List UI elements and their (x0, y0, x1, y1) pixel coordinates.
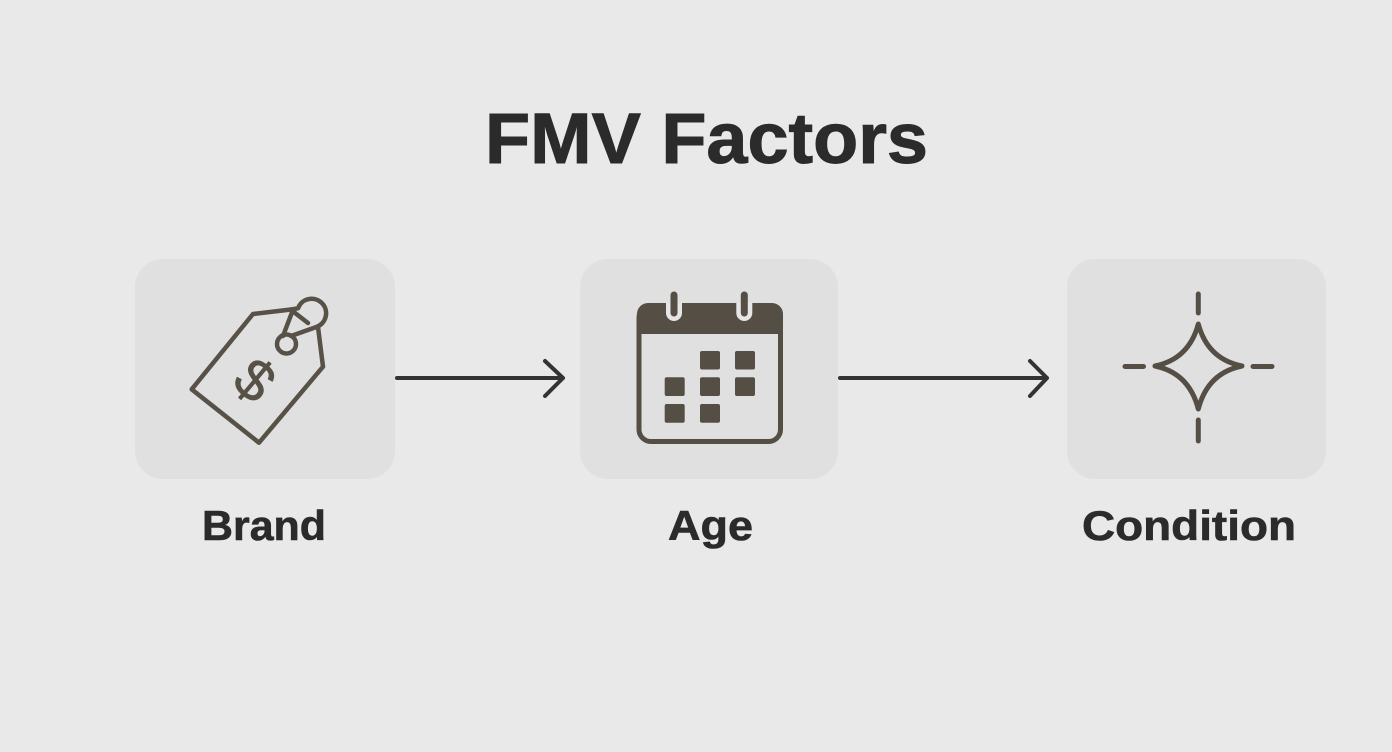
panel: brand (135, 259, 395, 479)
icon: sparkle (1125, 294, 1272, 441)
icon: price tag (192, 299, 326, 443)
icon: calendar (637, 295, 783, 442)
label: age: Age (668, 502, 753, 549)
label: brand: Brand (202, 502, 326, 549)
arrow: brand to age (397, 361, 563, 396)
label: condition: Condition (1082, 502, 1296, 549)
panel: condition (1067, 259, 1326, 479)
icon: price tag: $ (221, 345, 288, 416)
title: FMV Factors (485, 100, 928, 179)
arrow: age to condition (840, 361, 1047, 396)
panel: age (580, 259, 838, 479)
